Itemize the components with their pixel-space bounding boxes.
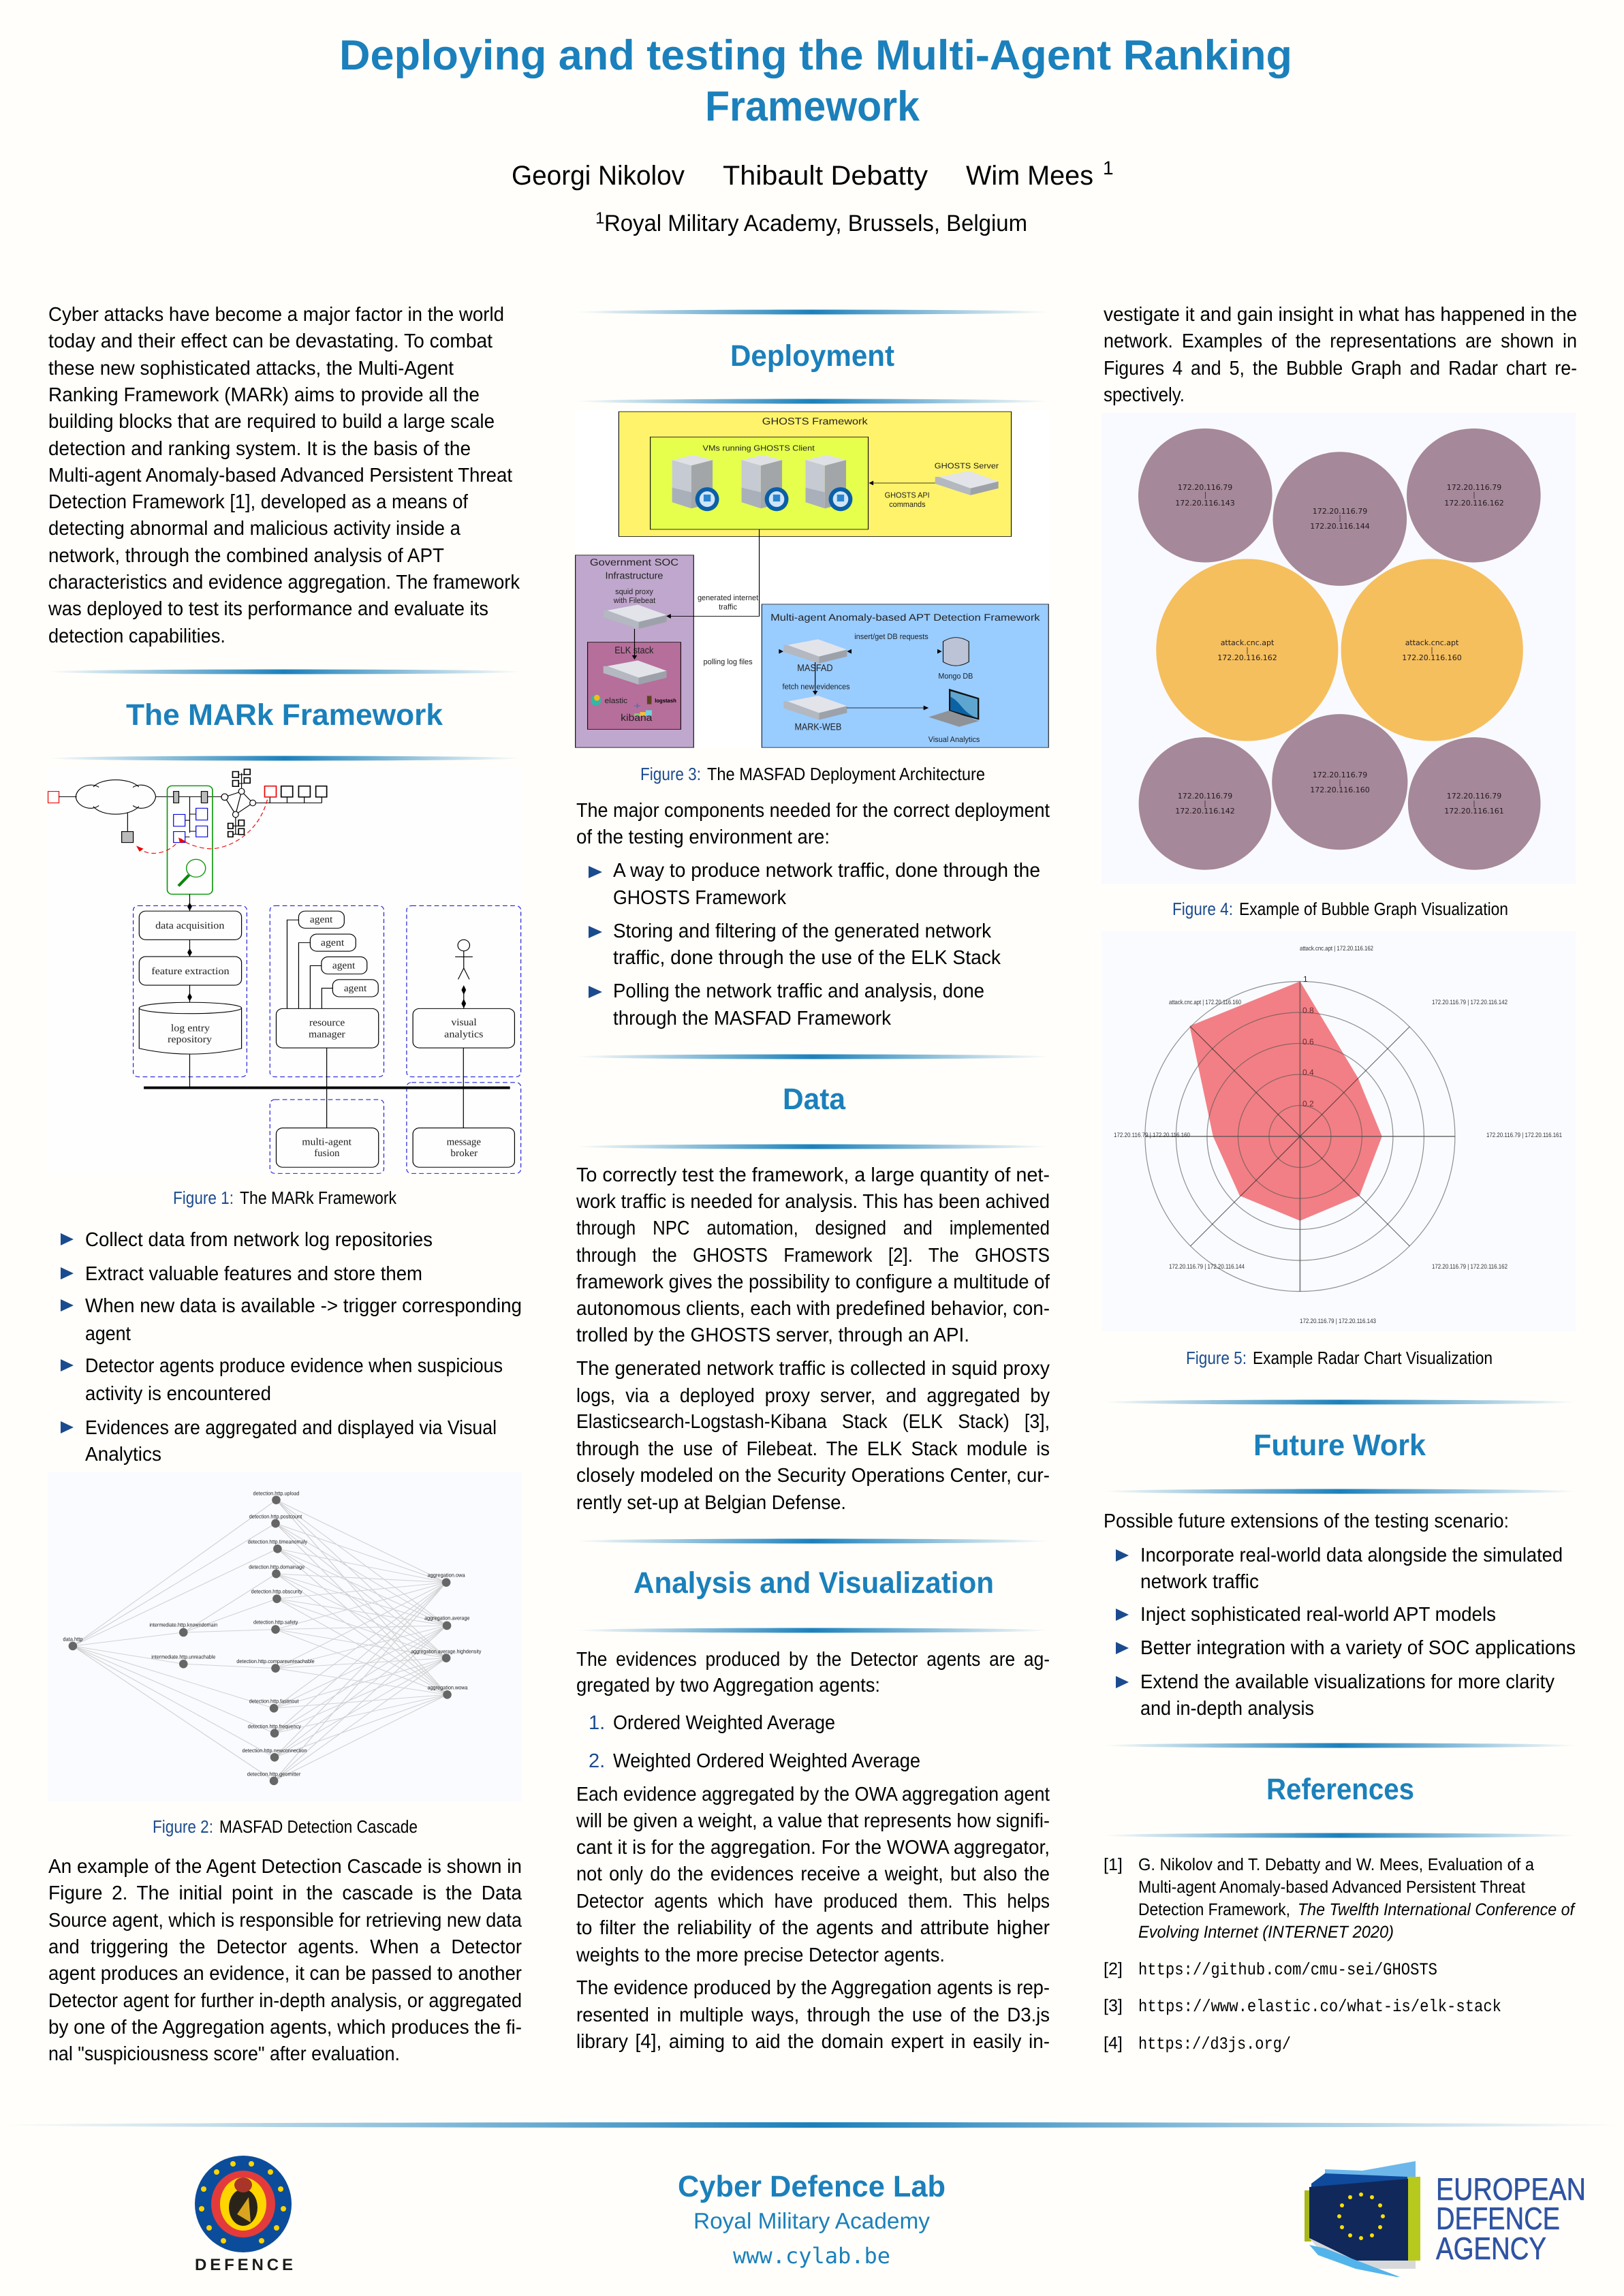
caption: figure 2 xyxy=(153,1816,418,1837)
diagram labels: fusion xyxy=(314,1148,340,1159)
logo: Belgian Defence: DEFENCE xyxy=(195,2256,293,2274)
graph nodes xyxy=(69,1495,452,1785)
diagram labels: agent xyxy=(310,914,333,925)
logo: European Defence Agency: DEFENCE xyxy=(1436,2201,1560,2236)
text: aggregation weights paragraph: will be given a weight, a value that represents how signifi- xyxy=(576,1810,1050,1832)
panel: figure 4 bubble graph xyxy=(1102,413,1576,884)
bullet list: future work: Incorporate real-world data alongside the simulated xyxy=(1140,1545,1563,1566)
graph edges xyxy=(73,1500,448,1781)
box: GHOSTS framework: GHOSTS Framework xyxy=(762,416,868,426)
column 1 intro text: detection and ranking system. It is the basis of the xyxy=(48,438,471,460)
references list: [2] xyxy=(1104,1959,1123,1979)
graph node labels: aggregation.average xyxy=(424,1615,469,1622)
box: Government SOC infrastructure: ELK stack xyxy=(614,645,654,655)
text: aggregation weights paragraph xyxy=(576,1784,1050,1966)
caption: figure 5: Figure 5: xyxy=(1186,1348,1247,1368)
bullet list: major components: Polling the network traffic and analysis, done xyxy=(613,980,984,1002)
caption: figure 1 xyxy=(173,1188,397,1208)
box: GHOSTS framework: commands xyxy=(889,500,926,509)
text: agent detection cascade description: Source agent, which is responsible for retrieving new data xyxy=(48,1910,522,1932)
box: GHOSTS framework: GHOSTS API xyxy=(885,491,930,499)
references list: https://d3js.org/ xyxy=(1138,2034,1291,2054)
column 1 intro text: today and their effect can be devastating. To combat xyxy=(48,330,493,352)
graph node labels: data.http xyxy=(63,1636,82,1642)
text: aggregation intro: gregated by two Aggregation agents: xyxy=(576,1675,880,1696)
column 1 intro text: was deployed to test its performance and evaluate its xyxy=(48,598,488,620)
numbered list: aggregation agents xyxy=(589,1712,920,1772)
text: agent detection cascade description: An example of the Agent Detection Cascade is shown in xyxy=(48,1856,522,1878)
column 1 intro text: characteristics and evidence aggregation. The framework xyxy=(48,572,520,593)
graph node labels: detection.http.frequency xyxy=(248,1723,301,1729)
graph node labels: intermediate.http.unreachable xyxy=(151,1654,215,1660)
graph node labels: detection.http.geomitter xyxy=(247,1771,300,1777)
text: future work intro: Possible future extensions of the testing scenario: xyxy=(1104,1510,1509,1532)
box: Government SOC infrastructure: elastic xyxy=(605,696,627,705)
bubble labels: 172.20.116.79 xyxy=(1178,792,1232,801)
radar polygon xyxy=(1189,981,1382,1221)
heading: Analysis and Visualization: Analysis and Visualization xyxy=(634,1566,994,1600)
text: data paragraph 1: work traffic is needed for analysis. This has been achived xyxy=(576,1191,1050,1213)
graph node labels: detection.http.obscurity xyxy=(251,1588,302,1594)
column 1 intro text: detecting abnormal and malicious activity inside a xyxy=(48,518,461,540)
bullet list: major components: through the MASFAD Framework xyxy=(613,1008,891,1029)
text: agent detection cascade description: Detector agent for further in-depth analysis, or aggregated xyxy=(48,1990,522,2012)
caption: figure 3: The MASFAD Deployment Architecture xyxy=(707,764,985,784)
graph node labels: detection.http.postcount xyxy=(249,1513,302,1519)
connector labels: traffic xyxy=(719,602,737,611)
text: data paragraph 1 xyxy=(576,1164,1050,1346)
text: data paragraph 1: framework gives the possibility to configure a multitude of xyxy=(576,1271,1050,1293)
caption: figure 2: Figure 2: xyxy=(153,1816,213,1837)
diagram labels: agent xyxy=(321,937,345,948)
column 1 intro text: network, through the combined analysis of APT xyxy=(48,545,444,567)
title xyxy=(339,32,1292,130)
bullet list: MARk framework steps: Collect data from network log repositories xyxy=(85,1229,433,1251)
radar tick labels xyxy=(1302,974,1314,1108)
bubble labels: 172.20.116.143 xyxy=(1175,499,1235,508)
diagram labels: visual xyxy=(451,1017,477,1028)
bullet list: future work: and in-depth analysis xyxy=(1140,1698,1314,1720)
numbered list: aggregation agents: 1. xyxy=(589,1712,605,1734)
radar tick labels: 0.8 xyxy=(1302,1006,1314,1015)
bubble labels: 172.20.116.162 xyxy=(1217,653,1277,662)
text: major components intro: The major components needed for the correct deployment xyxy=(576,800,1050,822)
text: column 3 continuation: network. Examples of the representations are shown in xyxy=(1104,330,1577,352)
bullet list: MARk framework steps: agent xyxy=(85,1323,131,1345)
text: evidence representation paragraph: The evidence produced by the Aggregation agents is rep- xyxy=(576,1977,1050,1999)
footer: lab name and url: www.cylab.be xyxy=(733,2243,890,2269)
graph node labels: intermediate.http.knowndomain xyxy=(149,1622,217,1628)
text: aggregation weights paragraph: cant it is for the aggregation. For the WOWA aggregator, xyxy=(576,1837,1050,1859)
text: data paragraph 2: closely modeled on the Security Operations Center, cur- xyxy=(576,1465,1050,1487)
logo: European Defence Agency: EUROPEAN xyxy=(1436,2171,1586,2207)
bullet list: future work: Better integration with a variety of SOC applications xyxy=(1140,1637,1576,1659)
column 1 intro text: Ranking Framework (MARk) aims to provide all the xyxy=(48,384,480,406)
bullet list: MARk framework steps: When new data is available -> trigger corresponding xyxy=(85,1295,522,1317)
graph node labels: aggregation.wowa xyxy=(427,1685,468,1691)
box: multi-agent anomaly-based APT detection framework xyxy=(762,604,1048,747)
radar axis labels: 172.20.116.79 | 172.20.116.144 xyxy=(1169,1263,1245,1271)
diagram labels: message xyxy=(447,1136,481,1147)
box: multi-agent anomaly-based APT detection framework: fetch new evidences xyxy=(783,682,850,691)
authors xyxy=(512,157,1114,191)
bubble labels: attack.cnc.apt xyxy=(1405,638,1459,647)
references list: G. Nikolov and T. Debatty and W. Mees, Evaluation of a xyxy=(1138,1855,1534,1874)
diagram labels: agent xyxy=(344,983,367,994)
panel: figure 3 deployment architecture xyxy=(575,409,1049,747)
radar tick labels: 1 xyxy=(1303,974,1308,984)
text: column 3 continuation: spectively. xyxy=(1104,384,1185,406)
box: multi-agent anomaly-based APT detection framework: MARK-WEB xyxy=(794,722,841,732)
radar tick labels: 0.4 xyxy=(1302,1068,1314,1077)
column 1 intro text: Detection Framework [1], developed as a means of xyxy=(48,491,469,513)
column 1 intro text xyxy=(48,304,520,647)
text: data paragraph 1: trolled by the GHOSTS server, through an API. xyxy=(576,1324,969,1346)
text: aggregation intro: The evidences produced by the Detector agents are ag- xyxy=(576,1649,1050,1671)
footer: lab name and url: Cyber Defence Lab xyxy=(678,2170,946,2203)
box: Government SOC infrastructure: kibana xyxy=(621,712,653,723)
text: aggregation weights paragraph: Detector agents which have produced them. This helps xyxy=(576,1891,1050,1912)
text: agent detection cascade description xyxy=(48,1856,522,2065)
graph node labels: aggregation.owa xyxy=(427,1572,465,1579)
text: data paragraph 1: through NPC automation, designed and implemented xyxy=(576,1217,1050,1239)
text: column 3 continuation: vestigate it and gain insight in what has happened in the xyxy=(1104,304,1577,326)
diagram labels xyxy=(151,914,483,1159)
radar axis labels: attack.cnc.apt | 172.20.116.162 xyxy=(1300,945,1373,952)
bullet list: future work: network traffic xyxy=(1140,1571,1259,1593)
diagram labels: resource xyxy=(309,1017,345,1028)
text: agent detection cascade description: and triggering the Detector agents. When a Detector xyxy=(48,1936,522,1958)
box: multi-agent anomaly-based APT detection framework: Multi-agent Anomaly-based APT Detection Framework xyxy=(770,612,1040,623)
graph node labels: aggregation.average.highdensity xyxy=(411,1648,481,1654)
diagram labels: repository xyxy=(168,1034,212,1044)
references list: Multi-agent Anomaly-based Advanced Persistent Threat xyxy=(1138,1878,1525,1897)
text: major components intro: of the testing environment are: xyxy=(576,826,830,848)
text: agent detection cascade description: Figure 2. The initial point in the cascade is the Data xyxy=(48,1882,522,1904)
bubble labels: 172.20.116.79 xyxy=(1447,792,1501,801)
bubble labels: 172.20.116.142 xyxy=(1175,807,1235,816)
numbered list: aggregation agents: Weighted Ordered Weighted Average xyxy=(613,1750,920,1772)
bubble labels: 172.20.116.160 xyxy=(1310,786,1370,794)
text: data paragraph 2: through the use of Filebeat. The ELK Stack module is xyxy=(576,1438,1050,1460)
diagram labels: manager xyxy=(309,1029,345,1040)
numbered list: aggregation agents: Ordered Weighted Average xyxy=(613,1712,835,1734)
diagram labels: log entry xyxy=(171,1023,210,1034)
box: multi-agent anomaly-based APT detection framework: Visual Analytics xyxy=(928,735,980,744)
graph node labels: detection.http.fastinout xyxy=(249,1698,299,1705)
caption: figure 2: MASFAD Detection Cascade xyxy=(219,1816,418,1837)
text: evidence representation paragraph: library [4], aiming to aid the domain expert in easily in- xyxy=(576,2031,1050,2053)
references list: https://www.elastic.co/what-is/elk-stack xyxy=(1138,1997,1501,2017)
text: aggregation intro xyxy=(576,1649,1050,1696)
bullet list: major components: traffic, done through the use of the ELK Stack xyxy=(613,947,1001,969)
caption: figure 4: Figure 4: xyxy=(1172,899,1233,919)
authors: Wim Mees xyxy=(966,161,1093,191)
title: Framework xyxy=(705,83,920,130)
box: multi-agent anomaly-based APT detection framework: Mongo DB xyxy=(938,672,973,681)
radar axis labels: 172.20.116.79 | 172.20.116.161 xyxy=(1486,1132,1562,1139)
box: Government SOC infrastructure: logstash xyxy=(655,698,676,704)
numbered list: aggregation agents: 2. xyxy=(589,1750,605,1772)
radar tick labels: 0.6 xyxy=(1302,1037,1314,1046)
bubble labels: 172.20.116.144 xyxy=(1310,522,1370,531)
references list: Evolving Internet (INTERNET 2020) xyxy=(1138,1923,1394,1942)
bullet list: MARk framework steps: Analytics xyxy=(85,1444,161,1465)
text: evidence representation paragraph xyxy=(576,1977,1050,2053)
references list: [4] xyxy=(1104,2034,1123,2053)
graph node labels: detection.http.newconnection xyxy=(243,1748,307,1754)
heading: Future Work: Future Work xyxy=(1253,1429,1426,1462)
bubble labels: 172.20.116.79 xyxy=(1313,771,1367,779)
network topology xyxy=(48,769,327,895)
text: data paragraph 1: through the GHOSTS Framework [2]. The GHOSTS xyxy=(576,1245,1050,1267)
box: Government SOC infrastructure xyxy=(576,555,693,747)
graph node labels: detection.http.domainage xyxy=(249,1564,304,1570)
box: GHOSTS framework: VMs running GHOSTS Client xyxy=(703,444,815,452)
logo: European Defence Agency xyxy=(1305,2161,1586,2277)
footer: lab name and url: Royal Military Academy xyxy=(693,2208,930,2233)
references list: https://github.com/cmu-sei/GHOSTS xyxy=(1138,1960,1437,1980)
box: Government SOC infrastructure: squid proxy xyxy=(615,587,653,596)
box: Government SOC infrastructure: with Filebeat xyxy=(613,596,655,605)
caption: figure 1: Figure 1: xyxy=(173,1188,234,1208)
graph node labels: detection.http.upload xyxy=(253,1490,299,1496)
box: multi-agent anomaly-based APT detection framework: MASFAD xyxy=(797,662,833,673)
diagram labels: multi-agent xyxy=(302,1136,352,1147)
bubble labels: 172.20.116.162 xyxy=(1444,499,1504,508)
references list: The Twelfth International Conference of xyxy=(1298,1900,1576,1919)
text: major components intro xyxy=(576,800,1050,848)
text: data paragraph 2 xyxy=(576,1358,1050,1514)
radar axis labels: attack.cnc.apt | 172.20.116.160 xyxy=(1169,999,1241,1006)
text: column 3 continuation: Figures 4 and 5, the Bubble Graph and Radar chart re- xyxy=(1104,358,1577,379)
graph node labels: detection.http.compareunreachable xyxy=(236,1658,315,1664)
text: data paragraph 1: autonomous clients, each with predefined behavior, con- xyxy=(576,1298,1050,1320)
bubble labels: 172.20.116.79 xyxy=(1447,483,1501,492)
bullet list: major components: Storing and filtering of the generated network xyxy=(613,920,991,942)
text: data paragraph 1: To correctly test the framework, a large quantity of net- xyxy=(576,1164,1050,1186)
column 1 intro text: Cyber attacks have become a major factor in the world xyxy=(48,304,504,326)
radar axis labels: 172.20.116.79 | 172.20.116.143 xyxy=(1300,1318,1376,1325)
connector labels xyxy=(698,593,758,666)
title: Deploying and testing the Multi-Agent Ranking xyxy=(339,32,1292,79)
affiliation: 1 xyxy=(595,209,604,228)
text: aggregation weights paragraph: Each evidence aggregated by the OWA aggregation agent xyxy=(576,1784,1050,1805)
bubble labels xyxy=(1175,483,1504,816)
heading: The MARk Framework: The MARk Framework xyxy=(126,698,443,732)
bullet list: future work: Inject sophisticated real-world APT models xyxy=(1140,1604,1496,1626)
connector arrows xyxy=(632,481,942,710)
bullet list: MARk framework steps: Extract valuable features and store them xyxy=(85,1263,422,1285)
references list xyxy=(1104,1855,1576,2054)
panel: figure 1 MARk framework diagram xyxy=(48,768,522,1175)
graph node labels: detection.http.timeanomaly xyxy=(248,1538,307,1545)
authors: Thibault Debatty xyxy=(723,161,928,191)
bullet list: major components xyxy=(589,860,1040,1029)
diagram labels: data acquisition xyxy=(155,920,224,931)
diagram labels: analytics xyxy=(444,1029,483,1040)
graph node labels: detection.http.safety xyxy=(253,1619,298,1626)
bubble labels: 172.20.116.161 xyxy=(1444,807,1504,816)
text: data paragraph 2: logs, via a deployed proxy server, and aggregated by xyxy=(576,1385,1050,1407)
radar grid xyxy=(1145,981,1455,1292)
radar axis labels xyxy=(1114,945,1562,1325)
diagram labels: feature extraction xyxy=(151,965,230,977)
radar axis labels: 172.20.116.79 | 172.20.116.160 xyxy=(1114,1132,1190,1139)
box: Government SOC infrastructure: Infrastructure xyxy=(606,570,663,580)
text: data paragraph 2: Elasticsearch-Logstash-Kibana Stack (ELK Stack) [3], xyxy=(576,1411,1050,1433)
box: GHOSTS framework xyxy=(619,412,1012,536)
box: GHOSTS framework: GHOSTS Server xyxy=(935,461,999,470)
text: data paragraph 2: rently set-up at Belgian Defense. xyxy=(576,1492,846,1514)
box: multi-agent anomaly-based APT detection framework: insert/get DB requests xyxy=(854,632,928,641)
bullet list: MARk framework steps: Detector agents produce evidence when suspicious xyxy=(85,1355,503,1377)
diagram labels: agent xyxy=(332,960,356,971)
references list: Detection Framework, xyxy=(1138,1900,1290,1919)
bullet list: future work xyxy=(1116,1545,1576,1720)
authors: 1 xyxy=(1103,157,1114,179)
bullet list: MARk framework steps xyxy=(61,1229,522,1465)
box: Government SOC infrastructure: Government SOC xyxy=(590,557,678,568)
text: agent detection cascade description: by one of the Aggregation agents, which produces the fi- xyxy=(48,2017,522,2038)
text: column 3 continuation xyxy=(1104,304,1577,406)
caption: figure 3: Figure 3: xyxy=(640,764,701,784)
bullet list: future work: Extend the available visualizations for more clarity xyxy=(1140,1671,1555,1693)
logo: Belgian Defence xyxy=(195,2156,293,2274)
connector labels: generated internet xyxy=(698,593,758,602)
column 1 intro text: these new sophisticated attacks, the Multi-Agent xyxy=(48,358,454,379)
text: data paragraph 2: The generated network traffic is collected in squid proxy xyxy=(576,1358,1050,1380)
text: evidence representation paragraph: resented in multiple ways, through the use of the D3.js xyxy=(576,2004,1050,2026)
bullet list: MARk framework steps: Evidences are aggregated and displayed via Visual xyxy=(85,1417,497,1439)
heading: References: References xyxy=(1266,1773,1414,1806)
bubble labels: attack.cnc.apt xyxy=(1221,638,1275,647)
column 1 intro text: Multi-agent Anomaly-based Advanced Persistent Threat xyxy=(48,465,512,486)
bubble labels: 172.20.116.79 xyxy=(1313,507,1367,516)
caption: figure 5: Example Radar Chart Visualization xyxy=(1253,1348,1493,1368)
dashed module groups xyxy=(134,905,521,1173)
references list: [3] xyxy=(1104,1996,1123,2015)
bullet list: major components: GHOSTS Framework xyxy=(613,887,786,909)
column 1 intro text: building blocks that are required to build a large scale xyxy=(48,411,495,433)
caption: figure 1: The MARk Framework xyxy=(240,1188,397,1208)
diagram labels: broker xyxy=(450,1148,478,1159)
radar axis labels: 172.20.116.79 | 172.20.116.162 xyxy=(1432,1263,1508,1271)
radar tick labels: 0.2 xyxy=(1302,1099,1314,1108)
authors: Georgi Nikolov xyxy=(512,161,685,191)
bubble labels: 172.20.116.79 xyxy=(1178,483,1232,492)
icon: user xyxy=(455,940,473,979)
bubble labels: 172.20.116.160 xyxy=(1402,653,1462,662)
logo: European Defence Agency: AGENCY xyxy=(1436,2231,1546,2266)
radar axis labels: 172.20.116.79 | 172.20.116.142 xyxy=(1432,999,1508,1006)
text: aggregation weights paragraph: weights to the more precise Detector agents. xyxy=(576,1944,945,1966)
graph node labels xyxy=(63,1490,481,1777)
text: agent detection cascade description: agent produces an evidence, it can be passed to another xyxy=(48,1963,522,1985)
panel: figure 2 detection cascade graph xyxy=(48,1472,522,1801)
references list: [1] xyxy=(1104,1855,1123,1874)
caption: figure 4: Example of Bubble Graph Visualization xyxy=(1239,899,1508,919)
column 1 intro text: detection capabilities. xyxy=(48,625,225,647)
heading: Data: Data xyxy=(783,1083,846,1116)
text: aggregation weights paragraph: to filter the reliability of the agents and attribute higher xyxy=(576,1917,1050,1939)
text: agent detection cascade description: nal "suspiciousness score" after evaluation. xyxy=(48,2043,400,2065)
affiliation: Royal Military Academy, Brussels, Belgium xyxy=(604,211,1027,236)
footer: lab name and url xyxy=(678,2170,946,2269)
heading: Deployment: Deployment xyxy=(730,339,894,373)
bullet list: major components: A way to produce network traffic, done through the xyxy=(613,860,1040,882)
panel: figure 5 radar chart xyxy=(1102,931,1576,1331)
connector labels: polling log files xyxy=(703,657,753,666)
text: aggregation weights paragraph: not only do the evidences receive a weight, but also the xyxy=(576,1863,1050,1885)
bullet list: MARk framework steps: activity is encountered xyxy=(85,1383,271,1405)
box: Government SOC infrastructure: + xyxy=(634,701,641,711)
